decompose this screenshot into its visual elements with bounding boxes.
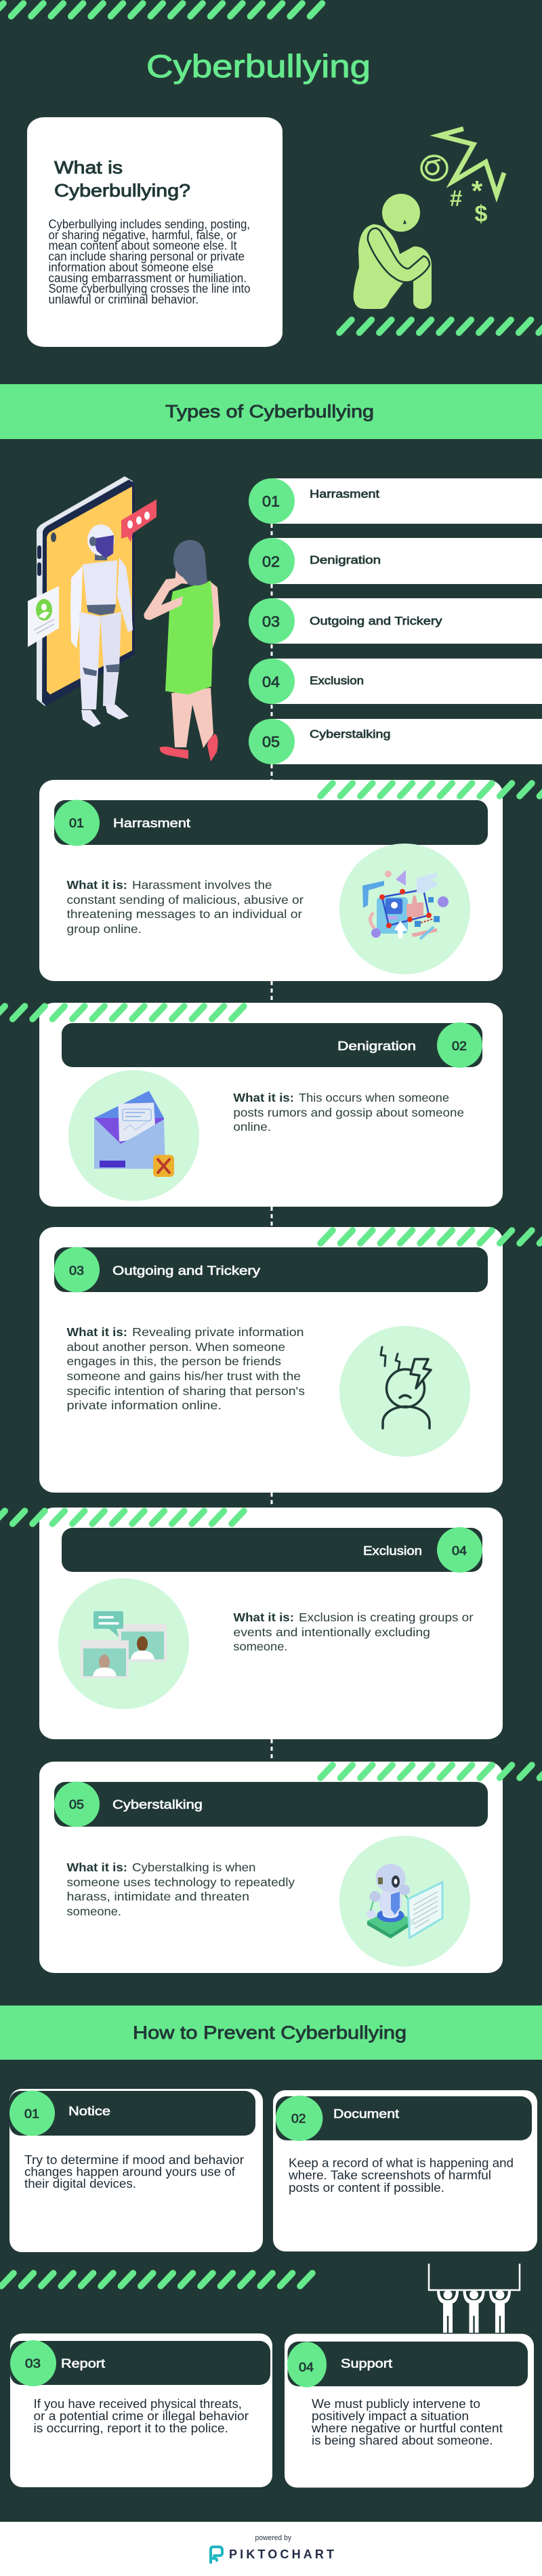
footer: powered by piktochart: powered by (255, 2534, 291, 2542)
header bar (62, 1527, 482, 1573)
advice text: is being shared about someone. (312, 2434, 493, 2447)
icon: video chat (58, 1579, 189, 1709)
description: Exclusion is creating groups or (299, 1611, 474, 1624)
description (66, 1325, 305, 1412)
stripes: top (0, 3, 322, 16)
illustration: robot on phone and woman (28, 476, 220, 762)
list row 02: Denigration (310, 554, 381, 566)
icon: stressed person (339, 1326, 470, 1457)
description: Harassment involves the (132, 878, 272, 892)
dashed connectors (271, 524, 272, 1762)
stripes: right of intro (339, 320, 542, 333)
advice text: changes happen around yours use of (24, 2165, 236, 2179)
list row 05 (249, 719, 542, 764)
description: posts rumors and gossip about someone (233, 1106, 464, 1119)
icon: sad person with abusive symbols: $ (475, 201, 488, 227)
section band: prevention (0, 2006, 542, 2060)
definition text: information about someone else (49, 260, 213, 274)
description: This occurs when someone (299, 1091, 449, 1104)
header bar: 02 (291, 2112, 306, 2125)
woman (144, 540, 220, 762)
definition text: unlawful or criminal behavior. (49, 293, 199, 306)
definition text: mean content about someone else. It (49, 239, 237, 253)
header bar: Harrasment (113, 816, 190, 830)
list row 01: 01 (262, 493, 280, 510)
description: What it is: (233, 1091, 294, 1104)
advice text: their digital devices. (24, 2177, 136, 2190)
advice text: Keep a record of what is happening and (289, 2157, 514, 2170)
header bar: 03 (25, 2356, 41, 2370)
description: threatening messages to an individual or (66, 907, 302, 921)
list row 03 (249, 598, 542, 644)
description (66, 878, 304, 936)
advice text (34, 2397, 249, 2435)
header bar (54, 1782, 488, 1827)
description: engages in this, the person be friends (66, 1354, 281, 1368)
person 3 (489, 2290, 511, 2333)
panel: exclusion (0, 1508, 503, 1739)
advice text (24, 2153, 244, 2190)
list row 05: 05 (262, 734, 280, 751)
description (66, 1861, 295, 1918)
icon: three people holding up frame (429, 2264, 520, 2333)
description: What it is: (233, 1611, 294, 1624)
stripes: between prevention rows (0, 2273, 312, 2286)
header bar (287, 2342, 528, 2388)
advice text: where negative or hurtful content (311, 2422, 503, 2435)
panel: outgoing and trickery (39, 1227, 542, 1493)
description: group online. (66, 922, 142, 936)
header bar: 02 (452, 1039, 467, 1053)
header bar: 01 (24, 2107, 39, 2121)
header bar: 04 (452, 1544, 467, 1558)
header bar: Denigration (337, 1039, 416, 1053)
description: private information online. (66, 1398, 222, 1412)
header bar: Support (341, 2356, 392, 2370)
header bar (276, 2096, 532, 2141)
section band: types (0, 384, 542, 439)
advice text: Try to determine if mood and behavior (24, 2153, 244, 2167)
description: someone uses technology to repeatedly (66, 1875, 295, 1889)
list row 04: 04 (262, 673, 280, 690)
advice text (311, 2397, 503, 2447)
advice text: or a potential crime or illegal behavior (34, 2409, 249, 2423)
description: about another person. When someone (66, 1340, 285, 1354)
icon: sad person with abusive symbols: # (450, 186, 462, 211)
header bar: 01 (69, 816, 84, 830)
section band: types: Types of Cyberbullying (165, 401, 374, 421)
header bar: Notice (68, 2104, 110, 2118)
panel: cyberstalking (39, 1762, 542, 1973)
header bar: 03 (69, 1264, 84, 1278)
header bar (54, 1247, 488, 1293)
advice text: where. Take screenshots of harmful (288, 2168, 491, 2182)
icon: design tools (339, 844, 470, 974)
list row 04 (249, 659, 542, 704)
description: someone. (66, 1905, 121, 1918)
title: Cyberbullying (146, 48, 371, 84)
header bar: Cyberstalking (112, 1798, 203, 1812)
definition text: Cyberbullying includes sending, posting, (49, 217, 250, 231)
icon: rejected envelope (68, 1071, 199, 1201)
description: someone and gains his/her trust with the (66, 1369, 301, 1383)
description: Cyberstalking is when (132, 1861, 256, 1874)
advice text (288, 2157, 514, 2195)
header bar (62, 1022, 482, 1068)
definition text: can include sharing personal or private (49, 249, 245, 263)
list row 03: Outgoing and Trickery (310, 615, 442, 627)
panel: notice (9, 2089, 263, 2252)
list row 01 (249, 478, 542, 524)
list row 02: 02 (262, 554, 280, 570)
panel: harrasment (39, 780, 542, 981)
heading: what is: Cyberbullying? (54, 180, 190, 201)
icon: sad person with abusive symbols: * (472, 175, 483, 207)
description (233, 1091, 464, 1134)
phone (37, 476, 135, 706)
heading: what is (54, 157, 190, 201)
section band: prevention: How to Prevent Cyberbullying (133, 2022, 406, 2043)
logo mark (211, 2547, 222, 2562)
description: What it is: (66, 1325, 127, 1339)
advice text: If you have received physical threats, (34, 2397, 242, 2411)
icon: robot with document (339, 1836, 470, 1966)
description: someone. (233, 1640, 287, 1653)
panel: what is cyberbullying (27, 117, 283, 347)
description: specific intention of sharing that person's (66, 1384, 305, 1398)
panel: report (10, 2333, 272, 2487)
description: What it is: (66, 1861, 127, 1874)
list row 05: Cyberstalking (310, 728, 390, 741)
profile card (28, 586, 59, 647)
description: What it is: (66, 878, 127, 892)
panel: denigration (0, 1003, 503, 1207)
footer: powered by piktochart: PIKTOCHART (229, 2548, 334, 2561)
list row 02 (249, 538, 542, 584)
header bar: Outgoing and Trickery (112, 1263, 261, 1278)
description: online. (233, 1120, 271, 1134)
definition text: Some cyberbullying crosses the line into (49, 282, 251, 295)
header bar (10, 2340, 270, 2386)
header bar (9, 2091, 255, 2136)
definition text (49, 217, 251, 306)
panel: support (285, 2333, 534, 2488)
footer: powered by piktochart (0, 2522, 542, 2576)
robot (70, 524, 133, 727)
advice text: is occurring, report it to the police. (34, 2422, 228, 2435)
advice text: posts or content if possible. (289, 2181, 444, 2195)
person 1 (437, 2290, 459, 2333)
description: harass, intimidate and threaten (66, 1890, 249, 1903)
red chat bubble (121, 499, 157, 542)
list row 04: Exclusion (310, 674, 364, 687)
header bar: 05 (69, 1798, 84, 1812)
definition text: or sharing negative, harmful, false, or (49, 228, 237, 242)
advice text: positively impact a situation (312, 2409, 469, 2423)
list row 03: 03 (262, 613, 280, 630)
person 2 (463, 2290, 485, 2333)
heading: what is: What is (54, 157, 123, 178)
header bar: 04 (299, 2361, 314, 2374)
description: Revealing private information (132, 1325, 304, 1339)
description (233, 1611, 474, 1653)
header bar: Exclusion (363, 1543, 422, 1558)
icon: sad person with abusive symbols (354, 129, 504, 309)
panel: document (273, 2090, 537, 2251)
header bar: Document (333, 2106, 399, 2121)
header bar (54, 799, 488, 846)
definition text: causing embarrassment or humiliation. (49, 271, 247, 285)
list row 01: Harrasment (310, 487, 379, 500)
description: constant sending of malicious, abusive or (66, 893, 304, 907)
header bar: Report (61, 2356, 105, 2370)
description: events and intentionally excluding (233, 1625, 430, 1639)
advice text: We must publicly intervene to (312, 2397, 480, 2411)
